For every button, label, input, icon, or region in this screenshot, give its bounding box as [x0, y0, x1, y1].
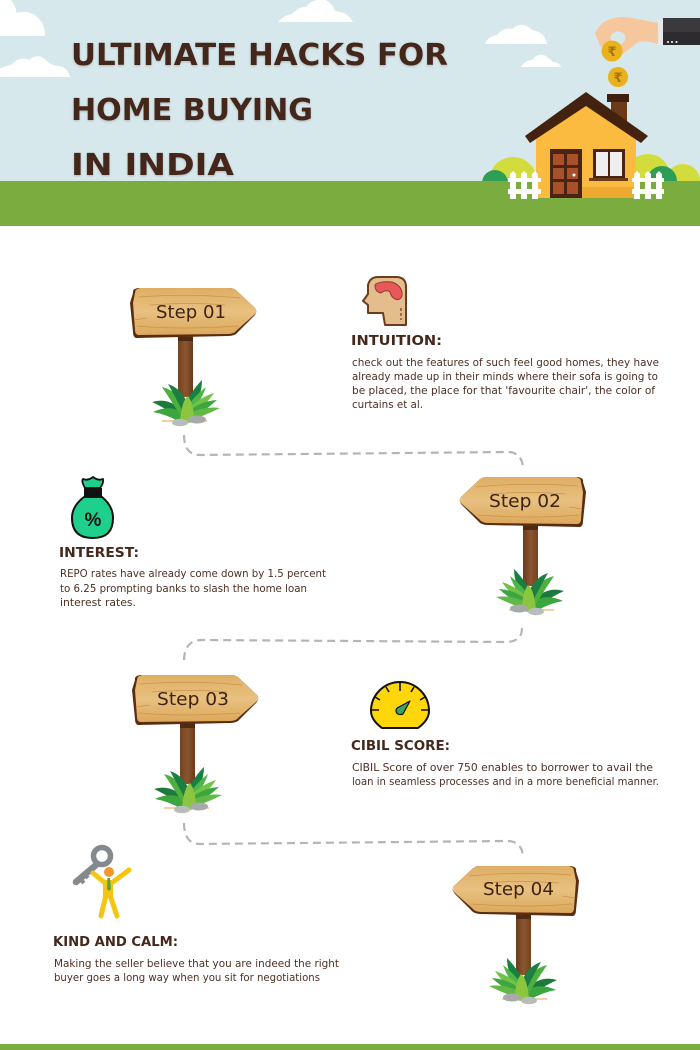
window: [589, 149, 628, 181]
title: ULTIMATE HACKS FOR: [71, 38, 448, 73]
title: IN INDIA: [71, 148, 235, 183]
signpost: step 03: Step 03: [157, 689, 229, 710]
dashed connector 2: [184, 628, 522, 661]
icon: money bag: %: [85, 510, 102, 531]
roof: [525, 92, 648, 143]
text: intuition: check out the features of such feel good homes, they have: [352, 357, 659, 369]
clouds: [0, 0, 561, 77]
text: intuition: be placed, the place for that 'favourite chair', the color of: [352, 385, 655, 397]
text: interest: REPO rates have already come down by 1.5 percent: [60, 568, 326, 580]
dashed connector 1: [184, 435, 523, 468]
text: cibil score: loan in seamless processes and in a more beneficial manner.: [352, 776, 659, 788]
coins: ₹: [607, 45, 617, 60]
text: cibil score: [351, 739, 659, 788]
signpost: step 02: Step 02: [489, 491, 561, 512]
title: HOME BUYING: [71, 93, 313, 128]
dashed connector 3: [184, 823, 523, 857]
fences: [508, 171, 664, 199]
illustration: house with coins: [508, 17, 700, 199]
text: intuition: INTUITION:: [351, 334, 442, 349]
text: kind and calm: [53, 935, 339, 984]
coins: ₹: [613, 71, 623, 86]
illustration: bushes: [482, 154, 700, 205]
signpost: step 04: Step 04: [483, 879, 554, 900]
icon: man with key: [76, 848, 129, 916]
house walls: [536, 106, 636, 198]
signpost: step 01: Step 01: [156, 302, 226, 323]
text: interest: to 6.25 prompting banks to slash the home loan: [60, 583, 307, 595]
header sky: [0, 0, 700, 182]
signpost: step 03: [132, 675, 258, 813]
signpost: step 02: [460, 477, 586, 615]
signpost: step 04: [453, 866, 579, 1004]
text: cibil score: CIBIL Score of over 750 enables to borrower to avail the: [352, 762, 653, 774]
text: kind and calm: Making the seller believe that you are indeed the right: [54, 958, 339, 970]
text: intuition: curtains et al.: [352, 399, 423, 411]
text: kind and calm: buyer goes a long way when you sit for negotiations: [54, 972, 320, 984]
icon: head with brain: [363, 277, 406, 325]
coins: [602, 40, 628, 87]
text: kind and calm: KIND AND CALM:: [53, 935, 178, 950]
footer band: [0, 1044, 700, 1050]
text: cibil score: CIBIL SCORE:: [351, 739, 450, 754]
text: interest: INTEREST:: [59, 546, 139, 561]
chimney: [607, 94, 629, 122]
title: [71, 38, 448, 183]
hand: [595, 17, 700, 56]
signpost: step 01: [130, 288, 256, 426]
icon: gauge: [371, 682, 429, 728]
text: interest: interest rates.: [60, 597, 136, 609]
door: [550, 149, 582, 198]
text: intuition: already made up in their minds where their sofa is going to: [352, 371, 658, 383]
figure: [93, 867, 129, 916]
text: interest: [59, 546, 326, 609]
ground band: [0, 181, 700, 226]
key: [76, 848, 110, 883]
icon: money bag: [72, 477, 113, 538]
text: intuition: [351, 334, 659, 411]
